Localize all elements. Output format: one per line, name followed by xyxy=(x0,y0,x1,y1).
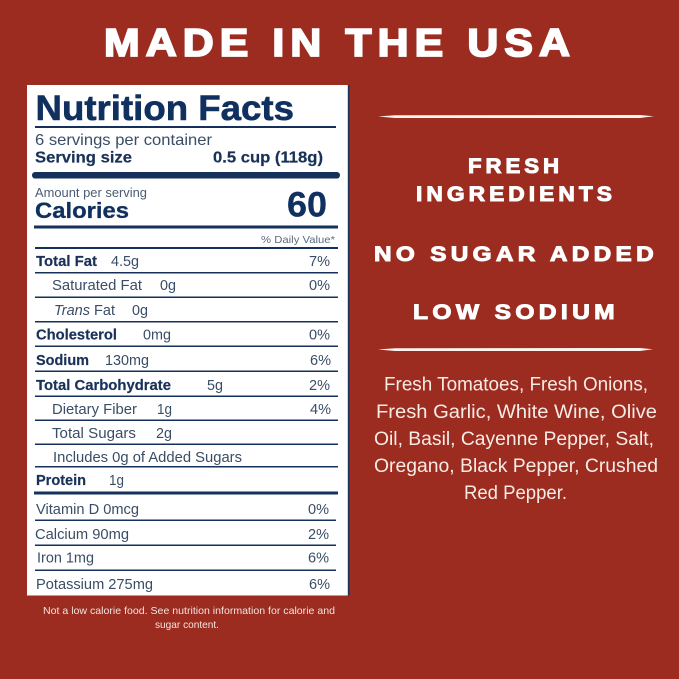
top brush divider xyxy=(378,115,654,118)
calories section: Amount per serving xyxy=(35,186,147,200)
row: dietary fiber xyxy=(35,402,338,421)
row: saturated fat: 0g xyxy=(160,278,176,294)
row: iron: Iron 1mg xyxy=(37,550,94,566)
footnote: sugar content. xyxy=(155,620,219,631)
servings information: 6 servings per container xyxy=(35,132,213,149)
row: protein: Protein xyxy=(36,473,86,489)
row: protein: 1g xyxy=(109,473,124,489)
row: potassium: Potassium 275mg xyxy=(36,577,153,593)
heading: nutrition facts: Nutrition Facts xyxy=(36,89,294,128)
row: iron: 6% xyxy=(308,550,329,566)
row: cholesterol: 0mg xyxy=(143,328,171,344)
title: MADE IN THE USA xyxy=(104,22,576,65)
row: calcium xyxy=(35,527,336,546)
ingredients list: Fresh Tomatoes, Fresh Onions, xyxy=(384,374,648,396)
ingredients list: Fresh Garlic, White Wine, Olive xyxy=(376,402,657,423)
claims list xyxy=(374,154,658,324)
row: potassium: 6% xyxy=(309,577,330,593)
row: saturated fat: 0% xyxy=(309,278,330,294)
ingredients list: Red Pepper. xyxy=(464,483,567,504)
row: dietary fiber: 1g xyxy=(157,402,172,418)
row: total sugars: 2g xyxy=(156,426,172,442)
calories section: Calories xyxy=(35,198,129,223)
ingredients list: Oil, Basil, Cayenne Pepper, Salt, xyxy=(374,429,654,450)
row: sodium: 6% xyxy=(310,353,331,369)
row: protein xyxy=(34,473,338,494)
footnote xyxy=(43,606,335,631)
row: total fat xyxy=(35,254,338,274)
daily value header: % Daily Value* xyxy=(261,234,335,246)
row: added sugars: Includes 0g of Added Sugars xyxy=(53,450,242,466)
row: sodium: 130mg xyxy=(105,353,149,369)
footnote: Not a low calorie food. See nutrition information for calorie and xyxy=(43,606,335,617)
row: total carbohydrate: 5g xyxy=(207,378,223,394)
row: trans fat: 0g xyxy=(132,303,148,319)
row: calcium: 2% xyxy=(308,527,329,543)
row: vitamin d xyxy=(35,502,336,521)
row: cholesterol: Cholesterol xyxy=(36,328,117,344)
calories section xyxy=(34,186,338,228)
row: sodium: Sodium xyxy=(36,353,89,369)
row: saturated fat xyxy=(35,278,338,298)
bottom brush divider xyxy=(378,348,653,351)
row: vitamin d: Vitamin D 0mcg xyxy=(36,502,139,518)
row: total sugars: Total Sugars xyxy=(52,426,136,442)
ingredients list: Oregano, Black Pepper, Crushed xyxy=(374,456,658,477)
claims list: NO SUGAR ADDED xyxy=(374,242,658,266)
row: total fat: 4.5g xyxy=(111,254,139,270)
claims list: LOW SODIUM xyxy=(413,300,619,324)
row: iron xyxy=(35,550,336,571)
row: cholesterol xyxy=(35,328,338,347)
row: dietary fiber: 4% xyxy=(310,402,331,418)
claims list: INGREDIENTS xyxy=(416,182,616,206)
row: total carbohydrate: 2% xyxy=(309,378,330,394)
row: trans fat: Trans Fat xyxy=(54,303,115,319)
row: vitamin d: 0% xyxy=(308,502,329,518)
row: total fat: Total Fat xyxy=(36,254,97,270)
servings information: Serving size xyxy=(35,150,132,166)
ingredients list xyxy=(374,374,658,504)
row: saturated fat: Saturated Fat xyxy=(52,278,142,294)
row: sodium xyxy=(35,353,338,372)
row: calcium: Calcium 90mg xyxy=(35,527,129,543)
servings information: 0.5 cup (118g) xyxy=(213,150,323,166)
row: trans fat xyxy=(35,303,338,322)
calories section: 60 xyxy=(287,186,327,224)
panel: nutrition facts label xyxy=(27,85,350,596)
row: dietary fiber: Dietary Fiber xyxy=(52,402,137,418)
row: potassium xyxy=(36,577,330,593)
row: cholesterol: 0% xyxy=(309,328,330,344)
servings information xyxy=(32,126,340,178)
row: total fat: 7% xyxy=(309,254,330,270)
row: total carbohydrate xyxy=(35,378,338,397)
row: total carbohydrate: Total Carbohydrate xyxy=(36,378,171,394)
claims list: FRESH xyxy=(468,154,563,178)
row: total sugars xyxy=(35,426,338,445)
